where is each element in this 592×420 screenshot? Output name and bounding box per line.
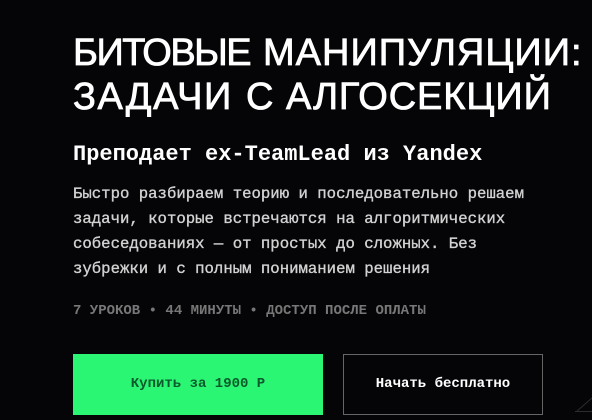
title word: АЛГОСЕКЦИЙ: АЛГОСЕКЦИЙ — [286, 76, 552, 118]
description text: собеседованиях — от простых до сложных. Без — [73, 235, 477, 253]
title word: МАНИПУЛЯЦИИ: МАНИПУЛЯЦИИ: — [263, 32, 583, 74]
corner mark — [575, 398, 592, 412]
description text: Быстро разбираем теорию и последовательно решаем — [73, 185, 524, 203]
description text — [73, 185, 524, 278]
description text: зубрежки и с полным пониманием решения — [73, 260, 430, 278]
description text: задачи, которые встречаются на алгоритмических — [73, 210, 505, 228]
title — [73, 32, 583, 118]
meta line: 7 УРОКОВ • 44 МИНУТЫ • ДОСТУП ПОСЛЕ ОПЛАТЫ — [73, 303, 426, 319]
title word: ЗАДАЧИ: ЗАДАЧИ — [73, 76, 233, 118]
button: start free — [343, 354, 543, 415]
subtitle: Преподает ex-TeamLead из Yandex — [73, 142, 482, 167]
title word: БИТОВЫЕ: БИТОВЫЕ — [73, 32, 250, 74]
title word: С: С — [246, 76, 273, 118]
button: start free: Начать бесплатно — [376, 376, 510, 392]
button: buy: Купить за 1900 Р — [131, 376, 265, 392]
button: buy — [73, 354, 323, 415]
